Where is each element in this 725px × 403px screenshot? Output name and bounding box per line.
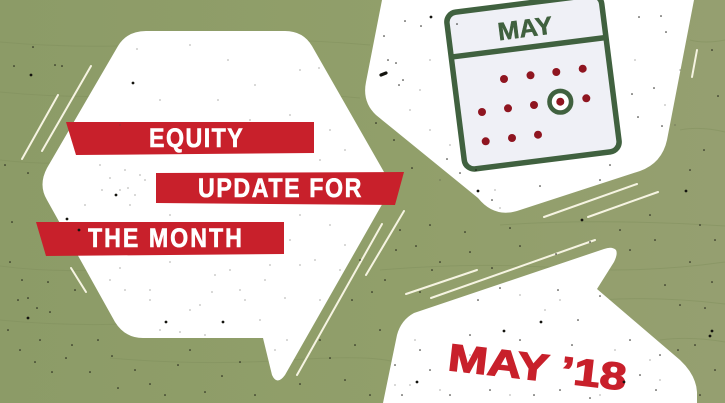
calendar icon [446,0,620,170]
banner: update for: UPDATE FOR [198,173,361,203]
date heading: MAY ’18 [446,337,629,399]
calendar month label: MAY [496,12,554,46]
banner: update for [156,172,404,205]
speech bubble: main hexagon [42,31,388,380]
panel: date bubble [383,248,697,403]
accent lines [22,50,697,375]
panel: calendar bubble [365,0,694,213]
banner: the month [36,222,284,256]
banner: equity: EQUITY [149,123,243,153]
banner: the month: THE MONTH [88,223,242,253]
banner: equity [66,122,314,155]
highlighted date ring [550,91,571,112]
calendar date dots [478,65,590,145]
